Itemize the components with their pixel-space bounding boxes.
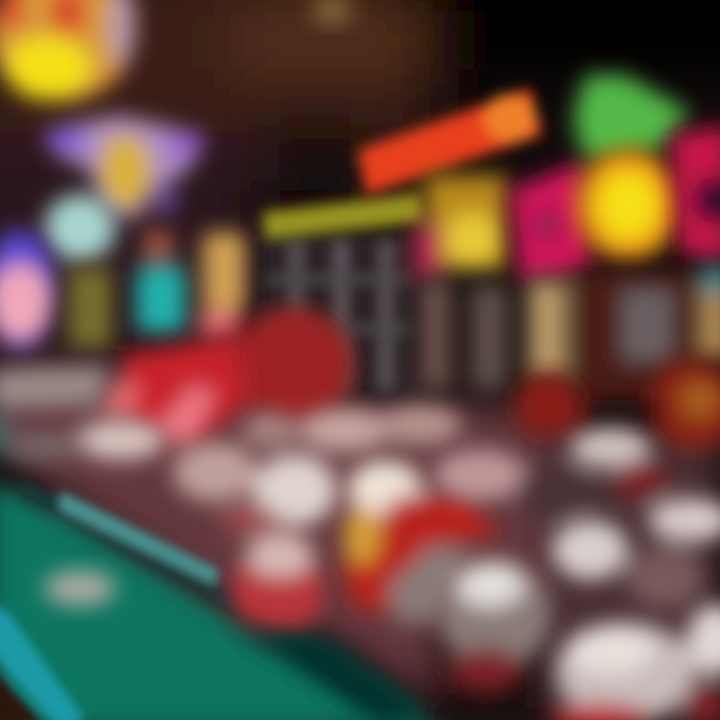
olive pillar (68, 268, 112, 348)
left pink and blue light (0, 230, 56, 350)
magenta neon panel (510, 160, 592, 280)
turquoise figure (136, 229, 186, 333)
olive yellow banner (262, 193, 425, 240)
loose chip on the table (44, 570, 116, 606)
purple and yellow neon sign (45, 115, 205, 220)
glowing yellow orb (576, 149, 680, 261)
chip stacks right (434, 428, 720, 608)
red chip cluster (100, 335, 250, 450)
yellow neon panel (412, 175, 507, 280)
ceiling glow spot (312, 0, 352, 24)
machine columns row (418, 265, 720, 410)
orange red neon banner (358, 88, 542, 195)
table edge strip (0, 480, 240, 720)
pale blue globe light (44, 194, 116, 262)
chip area underlay (0, 360, 720, 720)
crimson neon panel right (670, 125, 720, 260)
chip stacks middle (173, 405, 462, 636)
dark slot machine grid (262, 235, 412, 395)
dark red machine bases (514, 360, 720, 450)
pale chip row left (0, 365, 165, 460)
large foreground chips (439, 559, 720, 720)
green neon diamond (573, 75, 690, 160)
red round fan (230, 307, 354, 423)
tan figure (196, 232, 246, 341)
background: felt table (0, 410, 450, 720)
background: dark ceiling (0, 0, 720, 370)
top-left balloon sign (0, 0, 136, 101)
dark shadow under chips (230, 625, 430, 720)
red and gold centre chip (340, 460, 500, 625)
